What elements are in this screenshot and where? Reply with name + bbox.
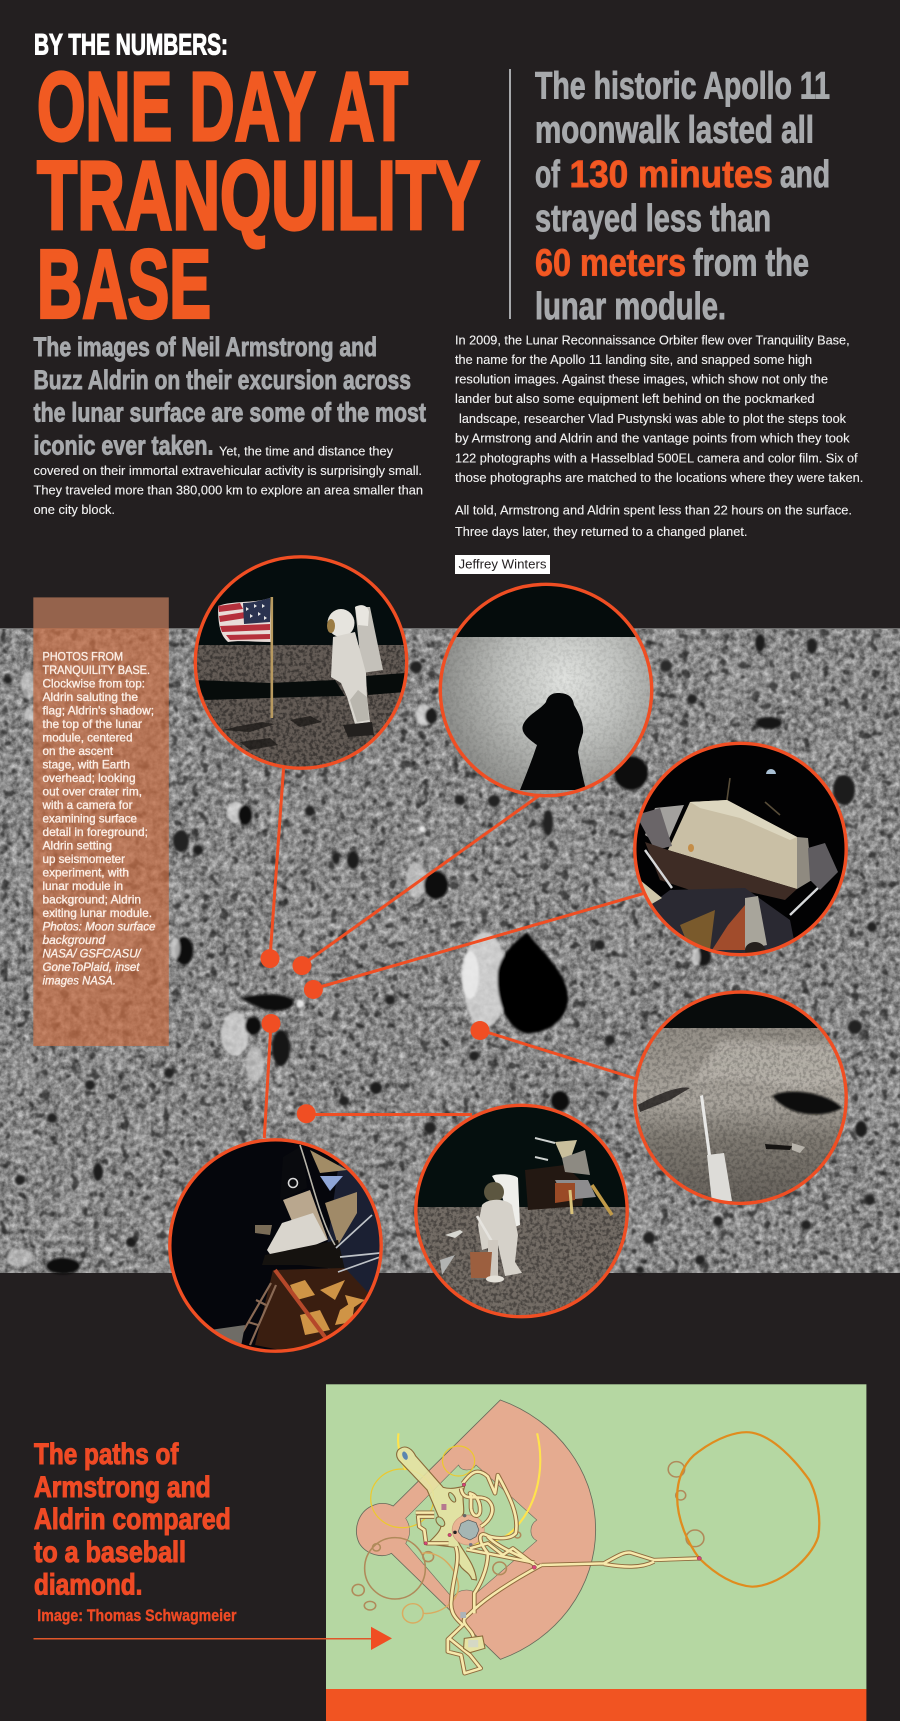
panel: photo caption: PHOTOS FROM	[42, 650, 123, 664]
heading: paths compared to a baseball diamond: Armstrong and	[34, 1471, 211, 1504]
panel: photo caption: with a camera for	[42, 798, 133, 812]
equipment: flag and camera box	[401, 1451, 485, 1653]
panel: photo caption: background	[42, 933, 105, 947]
lunar module site	[452, 1514, 484, 1546]
photo: crater rim with surface camera	[630, 988, 855, 1213]
intro text block: iconic ever taken.	[34, 431, 214, 461]
article text block: by Armstrong and Aldrin and the vantage points from which they took	[455, 430, 850, 445]
heading: paths compared to a baseball diamond: The paths of	[34, 1438, 179, 1471]
byline: Jeffrey Winters	[458, 556, 547, 572]
panel: photo caption: Aldrin setting	[42, 838, 112, 852]
intro text block: Yet, the time and distance they	[219, 443, 393, 458]
map panel: green field	[326, 1384, 866, 1689]
heading: paths compared to a baseball diamond	[34, 1438, 231, 1602]
pull quote	[535, 66, 830, 328]
pull quote: moonwalk lasted all	[535, 109, 814, 151]
panel: photo caption: on the ascent	[42, 744, 114, 758]
photo: Aldrin setting up seismometer	[410, 1100, 635, 1325]
pull quote: from the	[693, 242, 809, 284]
panel: photo caption: lunar module in	[42, 879, 123, 893]
panel: photo caption: the top of the lunar	[42, 717, 142, 731]
sample points	[424, 1483, 701, 1569]
panel: photo caption: detail in foreground;	[42, 825, 148, 839]
yellow arc	[398, 1433, 540, 1544]
intro text block: They traveled more than 380,000 km to explore an area smaller than	[34, 482, 423, 497]
panel: photo caption: out over crater rim,	[42, 784, 142, 798]
title: BASE	[37, 230, 211, 338]
panel: photo caption: TRANQUILITY BASE.	[42, 663, 150, 677]
location markers	[260, 949, 490, 1123]
article text block: those photographs are matched to the locations where they were taken.	[455, 470, 863, 485]
orange traverse loop	[677, 1432, 819, 1587]
panel: photo caption: Clockwise from top:	[42, 676, 145, 690]
connector lines	[264, 768, 643, 1138]
baseball diamond	[356, 1400, 596, 1659]
vertical divider	[509, 69, 511, 319]
panel: photo caption: overhead; looking	[42, 771, 136, 785]
title	[37, 52, 480, 338]
moon surface background	[0, 628, 900, 1274]
article text block: the name for the Apollo 11 landing site, and snapped some high	[455, 352, 812, 367]
intro text block	[34, 332, 426, 517]
intro text block: The images of Neil Armstrong and	[34, 332, 377, 362]
photo: Aldrin's shadow	[435, 580, 660, 805]
intro text block: Buzz Aldrin on their excursion across	[34, 365, 411, 395]
article text block: landscape, researcher Vlad Pustynski was able to plot the steps took	[459, 411, 846, 426]
walked area	[397, 1447, 476, 1580]
infield grass	[406, 1465, 537, 1598]
photo: top of the lunar module with Earth	[630, 738, 855, 965]
panel: photo caption: Aldrin saluting the	[42, 690, 138, 704]
panel: photo caption	[33, 597, 169, 1046]
article text block	[455, 332, 863, 539]
yellow crater outlines	[371, 1446, 475, 1528]
intro text block: the lunar surface are some of the most	[34, 398, 426, 428]
article text block: In 2009, the Lunar Reconnaissance Orbiter flew over Tranquility Base,	[455, 332, 850, 347]
panel: photo caption: up seismometer	[42, 852, 125, 866]
panel: photo caption: stage, with Earth	[42, 758, 130, 772]
panel: photo caption: background; Aldrin	[42, 892, 141, 906]
article text block: Three days later, they returned to a changed planet.	[455, 524, 747, 539]
map: paths over baseball diamond	[352, 1400, 819, 1673]
article text block: resolution images. Against these images, which show not only the	[455, 372, 828, 386]
article text block: lander but also some equipment left behind on the pockmarked	[455, 391, 815, 406]
heading: paths compared to a baseball diamond: diamond.	[34, 1569, 142, 1602]
pull quote: strayed less than	[535, 198, 771, 240]
pull quote: lunar module.	[535, 286, 726, 328]
heading: paths compared to a baseball diamond: to a baseball	[34, 1536, 186, 1569]
panel: photo caption: module, centered	[42, 730, 132, 744]
pull quote: 60 meters	[535, 242, 686, 284]
astronaut tracks, outline	[416, 1472, 699, 1673]
heading: paths compared to a baseball diamond: Aldrin compared	[34, 1503, 231, 1536]
brown crater outlines	[352, 1462, 704, 1610]
panel: photo caption: experiment, with	[42, 866, 129, 880]
photo: Aldrin exiting lunar module	[165, 1135, 395, 1360]
arrow to map	[34, 1627, 392, 1650]
intro text block: covered on their immortal extravehicular activity is surprisingly small.	[34, 463, 422, 478]
title: TRANQUILITY	[37, 141, 480, 250]
pull quote: and	[780, 154, 830, 196]
pull quote: of	[535, 154, 560, 196]
panel: photo caption: images NASA.	[42, 974, 116, 988]
panel: photo caption: exiting lunar module.	[42, 906, 152, 920]
panel: photo caption: flag; Aldrin's shadow;	[42, 704, 154, 718]
panel: photo caption: GoneToPlaid, inset	[42, 960, 140, 974]
holes in walked area	[434, 1492, 457, 1528]
title: ONE DAY AT	[37, 52, 408, 161]
article text block: 122 photographs with a Hasselblad 500EL camera and color film. Six of	[455, 450, 858, 465]
panel: photo caption: examining surface	[42, 812, 137, 826]
article text block: All told, Armstrong and Aldrin spent less than 22 hours on the surface.	[455, 503, 852, 518]
photo: Aldrin saluting the flag	[190, 550, 415, 775]
orange footer band	[326, 1689, 866, 1721]
pull quote: 130 minutes	[570, 154, 773, 196]
intro text block: one city block.	[34, 502, 115, 517]
panel: photo caption: NASA/ GSFC/ASU/	[42, 946, 142, 960]
pale crater outlines	[402, 1553, 459, 1623]
kicker: by the numbers: BY THE NUMBERS:	[34, 28, 228, 62]
astronaut tracks, fill	[416, 1472, 699, 1673]
image credit: Image: Thomas Schwagmeier	[37, 1606, 237, 1625]
panel: photo caption: Photos: Moon surface	[42, 920, 156, 934]
